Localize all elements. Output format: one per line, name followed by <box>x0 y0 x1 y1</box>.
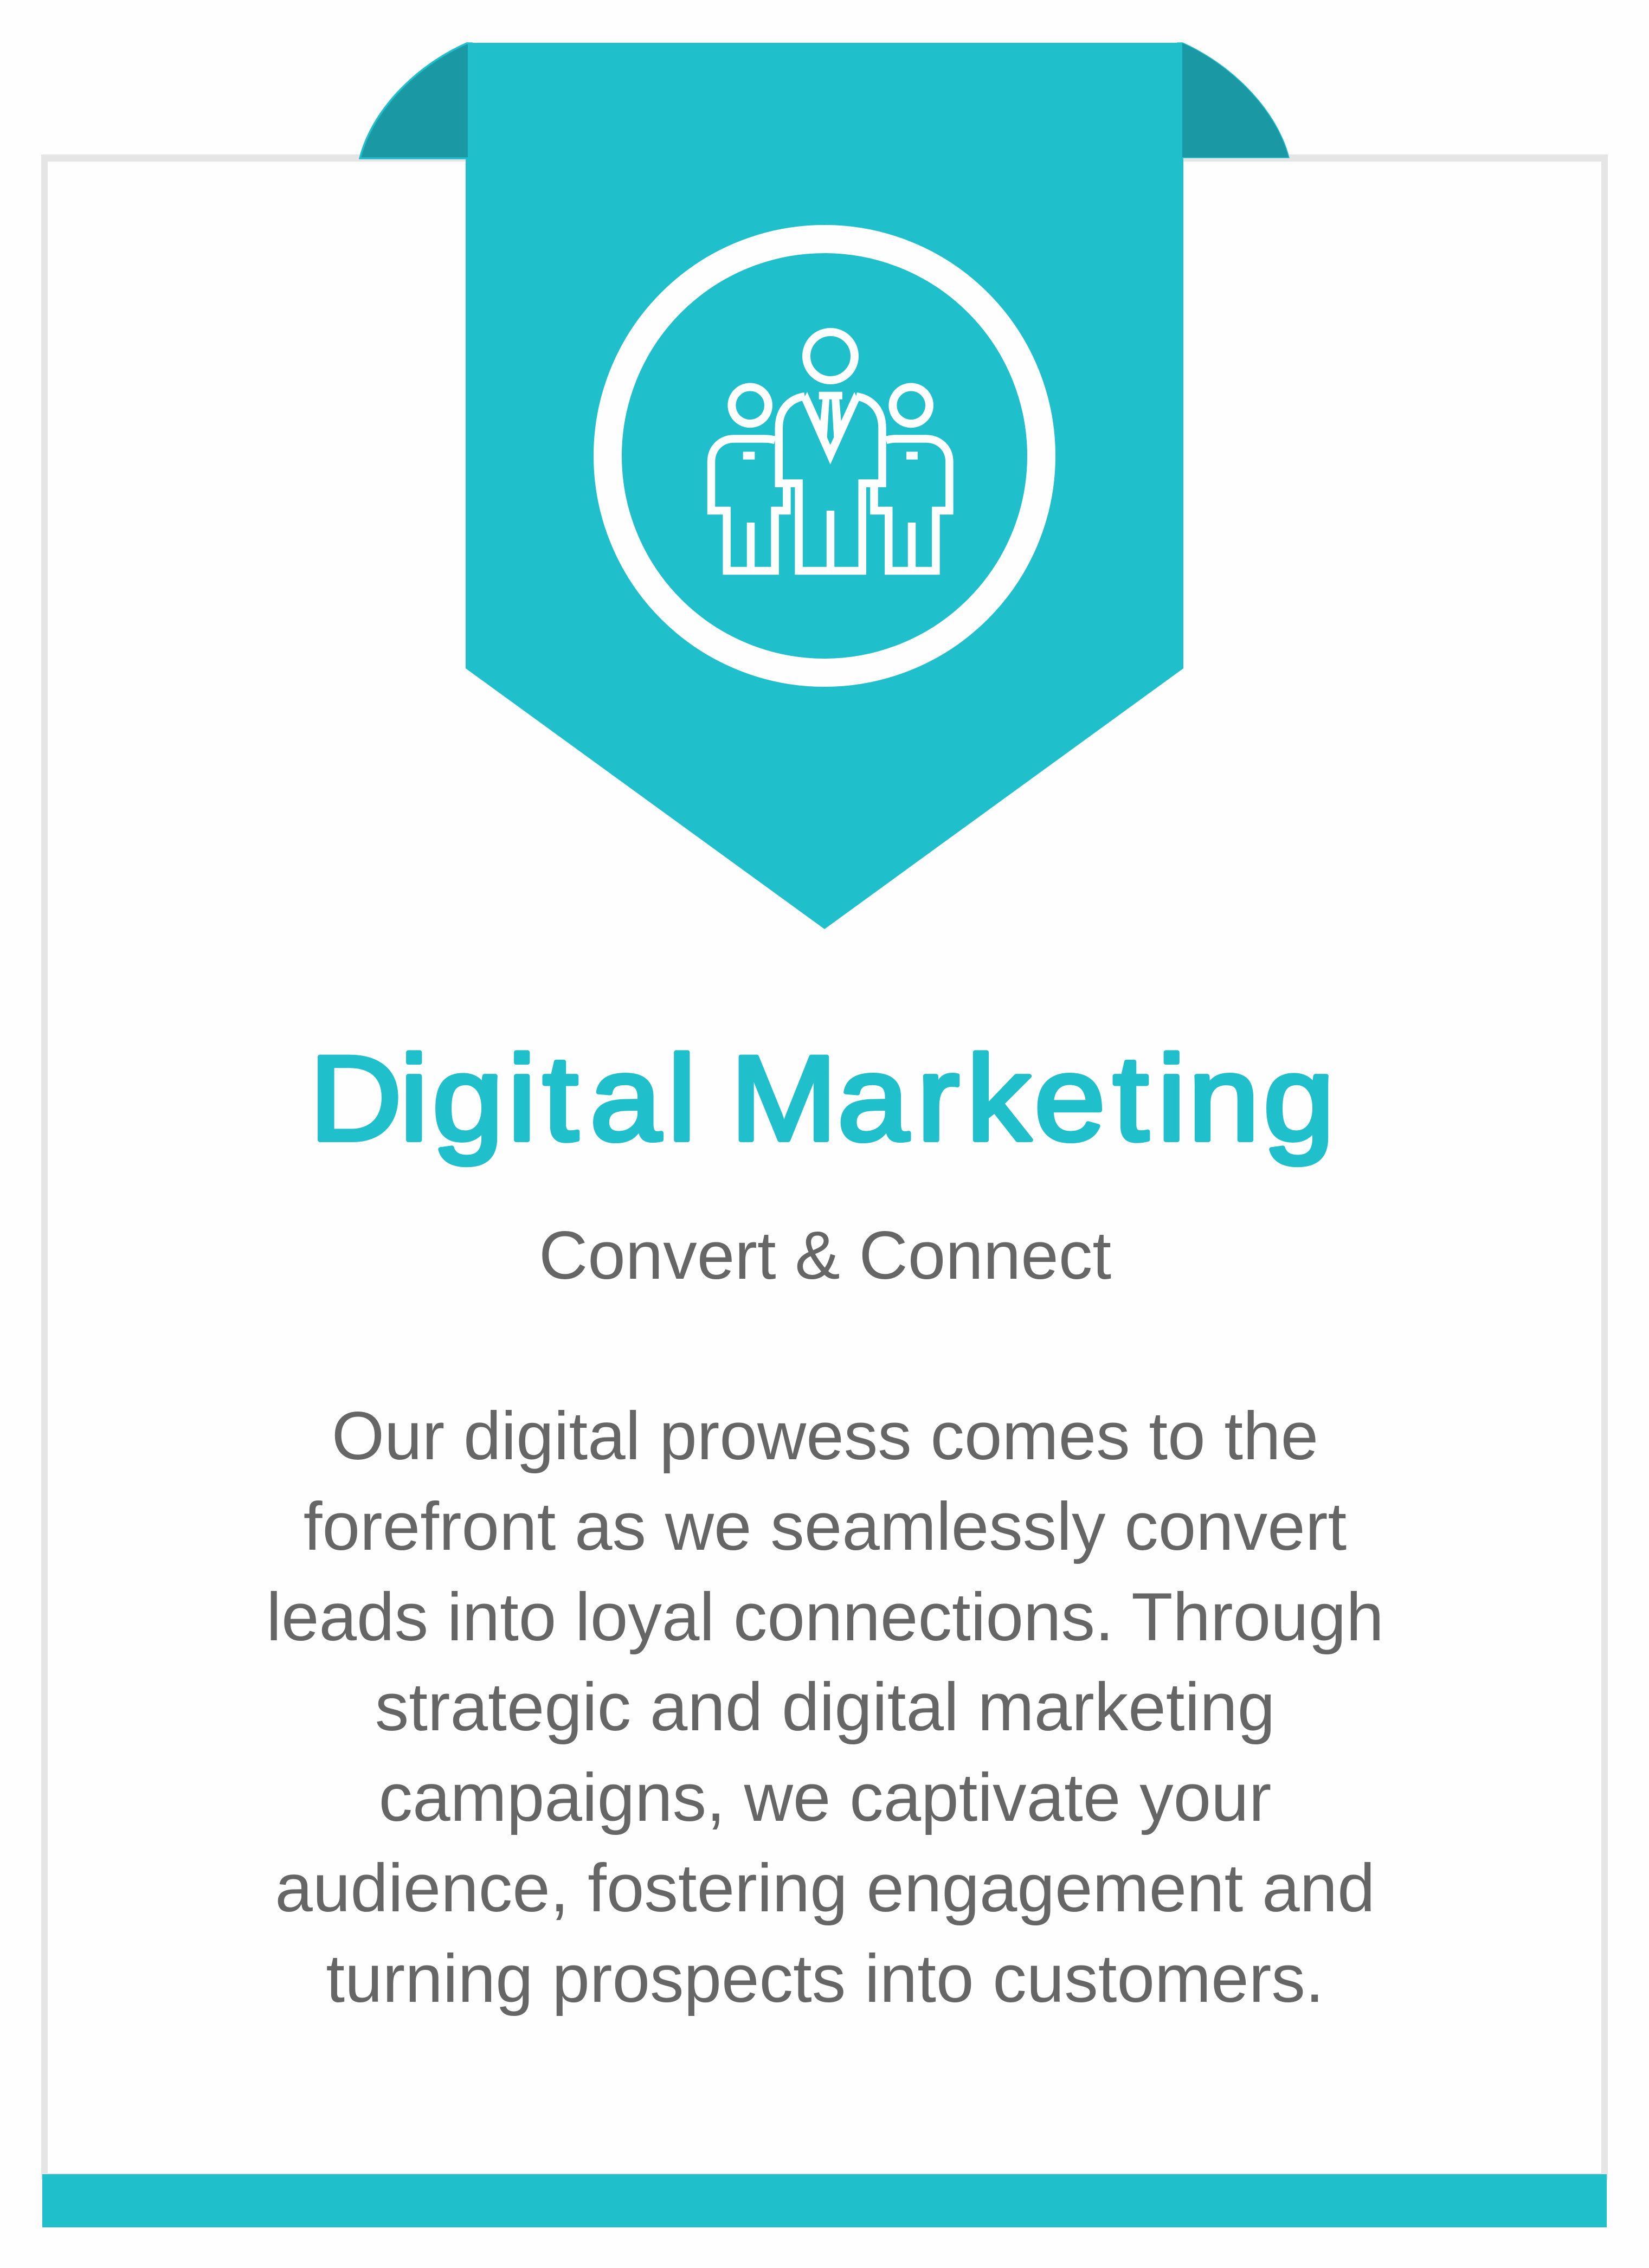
fold: left dark tab <box>360 43 472 159</box>
body text: turning prospects into customers. <box>326 1941 1324 2016</box>
body text <box>266 1399 1384 2016</box>
body text: forefront as we seamlessly convert <box>304 1489 1347 1564</box>
footer bar <box>42 2174 1607 2227</box>
subtitle: Convert & Connect <box>539 1218 1111 1293</box>
title: Digital Marketing <box>310 1030 1335 1166</box>
body text: campaigns, we captivate your <box>379 1760 1271 1835</box>
body text: Our digital prowess comes to the <box>332 1399 1318 1474</box>
fold: right dark tab <box>1177 43 1289 158</box>
icon ring <box>608 239 1041 673</box>
body text: audience, fostering engagement and <box>275 1851 1375 1926</box>
body text: strategic and digital marketing <box>375 1670 1275 1745</box>
icon: business team <box>711 332 949 571</box>
ribbon banner <box>466 43 1183 929</box>
body text: leads into loyal connections. Through <box>266 1580 1384 1655</box>
